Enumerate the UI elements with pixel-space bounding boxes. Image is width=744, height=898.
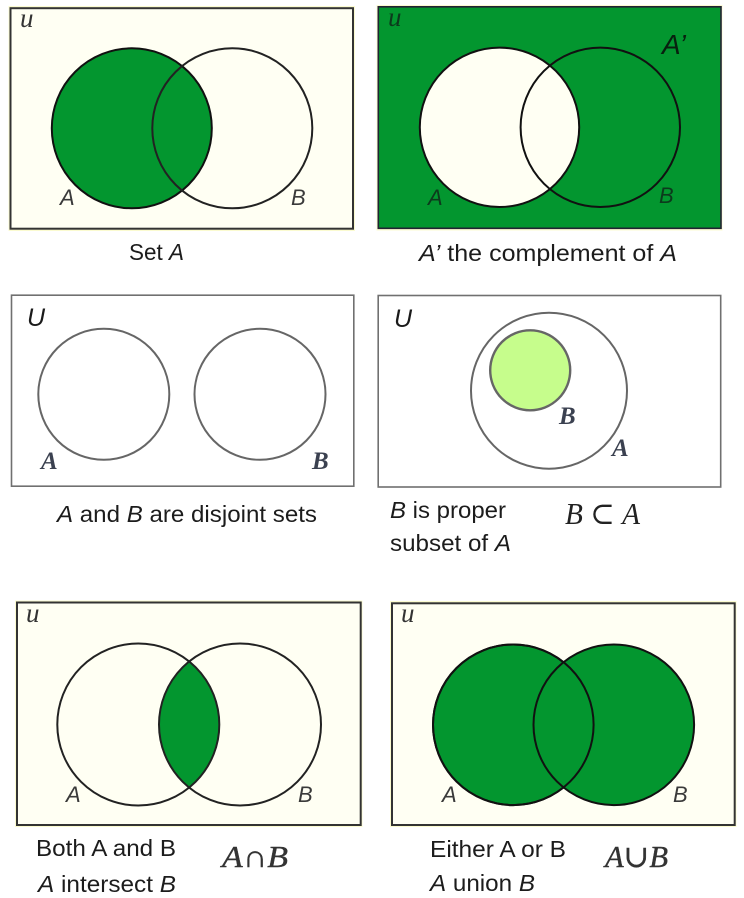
caption: B is proper subset of A: subset of A bbox=[390, 530, 511, 556]
panel: set A bbox=[8, 3, 355, 231]
caption: both A and B: Both A and B bbox=[36, 835, 176, 861]
caption: either A or B: A union B bbox=[428, 870, 535, 896]
label: U: U bbox=[27, 304, 46, 332]
label: A prime: A’ bbox=[660, 29, 687, 60]
caption: B is proper subset of A: B is proper bbox=[390, 497, 506, 523]
label: u: u bbox=[20, 3, 34, 33]
label: A: A bbox=[39, 448, 58, 475]
panel: union bbox=[390, 598, 736, 827]
circle A bbox=[57, 644, 219, 806]
label: U: U bbox=[394, 305, 413, 333]
label: u: u bbox=[388, 2, 402, 32]
label: u: u bbox=[26, 598, 40, 628]
label: A: A bbox=[610, 435, 629, 462]
caption: both A and B bbox=[36, 835, 176, 897]
caption: B is proper subset of A bbox=[390, 497, 511, 556]
circle A outline bbox=[433, 644, 594, 805]
circle B filled bbox=[490, 330, 570, 410]
circle B bbox=[159, 644, 321, 806]
label: A: A bbox=[58, 185, 75, 210]
circle B outline bbox=[152, 48, 312, 208]
label: u: u bbox=[401, 598, 414, 628]
lens: A and B bbox=[160, 662, 218, 786]
circle B outline bbox=[521, 48, 680, 207]
label: B: B bbox=[659, 183, 674, 208]
label: B: B bbox=[558, 403, 576, 430]
formula: A intersect B: A∩B bbox=[220, 839, 288, 874]
circle A bbox=[471, 313, 627, 469]
circle B bbox=[194, 329, 326, 460]
caption: either A or B: Either A or B bbox=[430, 836, 566, 862]
formula: A union B: A∪B bbox=[603, 839, 668, 874]
circle B filled bbox=[534, 644, 694, 805]
panel: complement of A bbox=[376, 2, 722, 230]
label: A: A bbox=[64, 782, 81, 807]
caption: set A: Set A bbox=[129, 239, 184, 265]
panel: proper subset bbox=[378, 296, 721, 487]
label: A: A bbox=[426, 185, 443, 210]
caption: both A and B: A intersect B bbox=[36, 871, 176, 897]
caption: complement of A: A’ the complement of A bbox=[417, 240, 677, 266]
circle A blank bbox=[420, 48, 579, 207]
circle A filled bbox=[52, 48, 212, 208]
formula: B subset A: B ⊂ A bbox=[565, 496, 641, 531]
label: B: B bbox=[298, 782, 313, 807]
panel: intersection bbox=[15, 598, 362, 827]
panel: disjoint sets bbox=[12, 295, 354, 486]
label: A: A bbox=[440, 782, 457, 807]
caption: disjoint sets: A and B are disjoint sets bbox=[55, 501, 317, 527]
circle A filled bbox=[433, 644, 594, 805]
label: B: B bbox=[311, 448, 329, 475]
label: B: B bbox=[673, 782, 688, 807]
circle A bbox=[38, 329, 169, 460]
caption: either A or B bbox=[428, 836, 566, 896]
label: B: B bbox=[291, 185, 306, 210]
